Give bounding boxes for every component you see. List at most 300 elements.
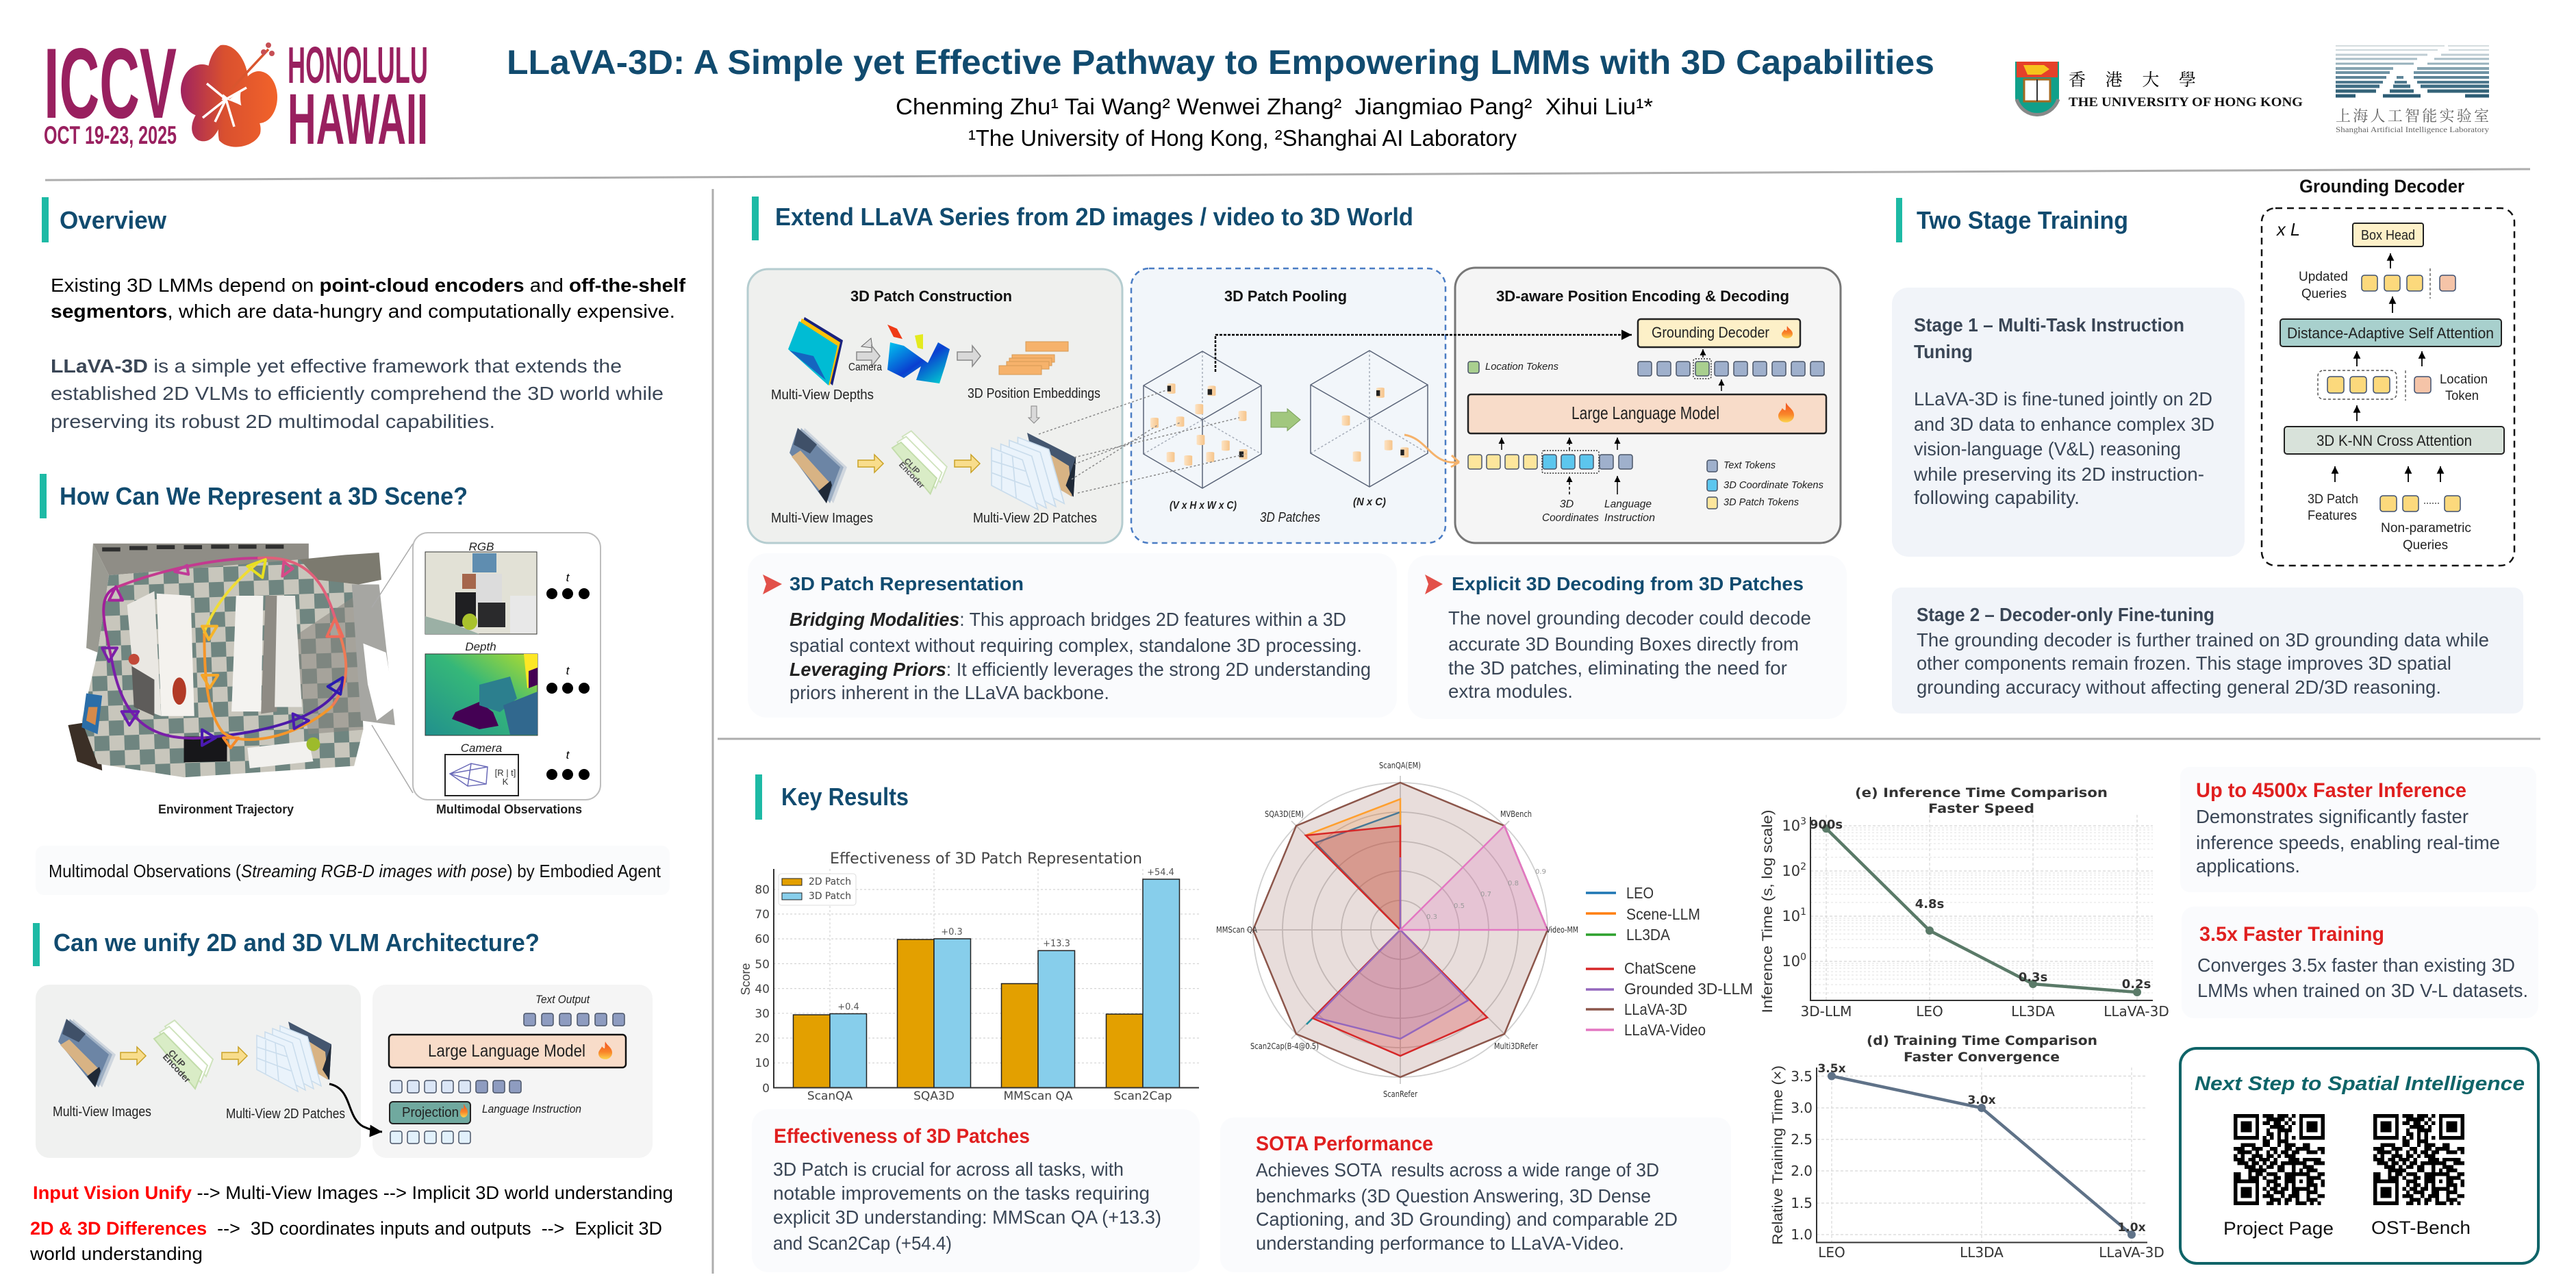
heading: How Can We Represent a 3D Scene? bbox=[60, 482, 468, 510]
y axis label: Relative Training Time (×) bbox=[1770, 1065, 1786, 1245]
value labels: 3.5x bbox=[1817, 1062, 1846, 1076]
logo: University of Hong Kong: THE UNIVERSITY OF HONG KONG bbox=[2069, 95, 2303, 110]
card: stage 1 bbox=[1892, 288, 2245, 557]
y tick labels bbox=[1791, 1068, 1813, 1243]
x tick labels bbox=[1801, 1003, 2169, 1020]
label: language instruction bbox=[1604, 498, 1655, 524]
label: 3D patch features: 3D Patch bbox=[2308, 492, 2358, 507]
card: effectiveness of 3D patches: explicit 3D understanding: MMScan QA (+13.3) bbox=[773, 1207, 1161, 1228]
camera pose box: [R | t] bbox=[495, 768, 516, 778]
multi-view 2D patches bbox=[257, 1022, 331, 1091]
body text: segmentors , which are data-hungry and computationally expensive. bbox=[51, 301, 675, 322]
label: location token: Location bbox=[2440, 372, 2488, 387]
y tick labels: 0 bbox=[762, 1082, 770, 1096]
body text: established 2D VLMs to efficiently comprehend the 3D world while bbox=[51, 383, 664, 404]
CLIP encoder cards: CLIP bbox=[902, 456, 922, 476]
conference logo: ICCV Honolulu Hawaii: HAWAII bbox=[288, 79, 428, 160]
y tick labels: 2 bbox=[1800, 861, 1806, 872]
axes bbox=[1810, 817, 2153, 1000]
value labels: 0.3s bbox=[2019, 970, 2047, 985]
Grounding Decoder box: Grounding Decoder bbox=[1652, 324, 1769, 341]
box head: Box Head bbox=[2361, 228, 2415, 243]
y axis label: Inference Time (s, log scale) bbox=[1760, 809, 1776, 1013]
CLIP encoder cards: Encoder bbox=[161, 1052, 192, 1085]
legend: 2D Patch bbox=[809, 876, 851, 887]
axis labels: ScanRefer bbox=[1383, 1089, 1417, 1099]
card text: Bridging Modalities: This approach bridges 2D features within a 3D bbox=[790, 609, 1346, 630]
axis labels: ScanQA(EM) bbox=[1379, 761, 1421, 770]
legend: ChatScene bbox=[1624, 959, 1696, 977]
card: effectiveness of 3D patches: notable improvements on the tasks requiring bbox=[773, 1183, 1150, 1204]
series: Grounded 3D-LLM bbox=[1315, 857, 1468, 1039]
card: faster inference: applications. bbox=[2196, 855, 2300, 876]
x tick labels: LLaVA-3D bbox=[2104, 1003, 2169, 1020]
conference logo: ICCV Honolulu Hawaii: OCT 19-23, 2025 bbox=[44, 121, 177, 149]
x tick labels: SQA3D bbox=[913, 1089, 955, 1103]
value labels bbox=[837, 868, 1174, 1012]
CLIP encoder cards bbox=[892, 431, 947, 494]
section: Overview bbox=[42, 197, 686, 432]
label: non-parametric queries: Non-parametric bbox=[2381, 521, 2471, 535]
logo: Shanghai AI Laboratory: 上海人工智能实验室 bbox=[2336, 105, 2489, 126]
card: stage 1: following capability. bbox=[1914, 487, 2080, 508]
card: stage 1: while preserving its 2D instruction- bbox=[1913, 464, 2204, 485]
legend: token types bbox=[1707, 459, 1823, 509]
radial tick labels: 0.7 bbox=[1480, 891, 1491, 898]
caption box: Multimodal Observations (Streaming RGB-D images with pose) by Embodied Agent bbox=[49, 861, 661, 881]
accent bar bbox=[755, 774, 762, 820]
QR code: OST-Bench bbox=[2373, 1116, 2464, 1203]
section: Can we unify 2D and 3D VLM Architecture bbox=[29, 923, 673, 1264]
section: Key Results bbox=[739, 761, 2538, 1272]
label: location token bbox=[2440, 372, 2488, 403]
value labels: +13.3 bbox=[1043, 939, 1070, 949]
legend: Grounded 3D-LLM bbox=[1624, 980, 1753, 998]
label: Camera: Camera bbox=[461, 742, 502, 755]
y tick labels: 3.0 bbox=[1791, 1100, 1813, 1116]
card: faster training: Converges 3.5x faster than existing 3D bbox=[2197, 955, 2515, 976]
label: 3D patch features bbox=[2308, 492, 2358, 523]
bars: 3D patch bbox=[830, 879, 1179, 1087]
distance-adaptive self attention: Distance-Adaptive Self Attention bbox=[2287, 325, 2494, 342]
label: 3D Patches bbox=[1260, 510, 1320, 525]
x tick labels: Scan2Cap bbox=[1113, 1089, 1172, 1103]
pooled patches bbox=[1150, 383, 1409, 466]
panel title: 3D-aware Position Encoding & Decoding bbox=[1496, 288, 1789, 305]
card: stage 2: The grounding decoder is further trained on 3D grounding data while bbox=[1917, 629, 2489, 651]
label: 3D coordinates: 3D bbox=[1560, 498, 1574, 510]
line chart: inference time bbox=[1760, 785, 2169, 1020]
y axis label: Score bbox=[739, 963, 753, 996]
label: location token: Token bbox=[2445, 389, 2479, 403]
y tick labels: 40 bbox=[755, 983, 770, 996]
radial tick labels: 0.3 bbox=[1426, 913, 1437, 921]
logo: Shanghai AI Laboratory bbox=[2336, 46, 2489, 134]
legend: token types: 3D Coordinate Tokens bbox=[1723, 479, 1823, 491]
label: OST-Bench: OST-Bench bbox=[2371, 1217, 2471, 1238]
card: stage 2 bbox=[1892, 588, 2523, 714]
cube: N x C bbox=[1311, 351, 1428, 487]
card: explicit 3D decoding bbox=[1408, 555, 1847, 719]
y tick labels: 80 bbox=[755, 883, 770, 897]
LLM box bbox=[1468, 394, 1826, 433]
logo: University of Hong Kong: 香港大學 bbox=[2069, 66, 2196, 91]
card: SOTA performance: understanding performance to LLaVA-Video. bbox=[1256, 1233, 1624, 1254]
depth stack bbox=[788, 317, 843, 386]
icon: camera bbox=[861, 338, 872, 348]
conference logo: ICCV Honolulu Hawaii bbox=[44, 27, 428, 160]
text: HONOLULU bbox=[288, 36, 428, 94]
box head bbox=[2353, 223, 2423, 247]
panel: 3D patch construction bbox=[748, 269, 1122, 543]
CLIP encoder cards: Encoder bbox=[897, 460, 926, 490]
input token row bbox=[1468, 451, 1632, 473]
panel: vision pipeline bbox=[36, 985, 361, 1158]
arrow: dashed to grounding decoder bbox=[1215, 335, 1632, 372]
section: Two Stage Training bbox=[1892, 176, 2523, 714]
legend: location tokens: Location Tokens bbox=[1485, 361, 1558, 372]
arrows bbox=[2335, 466, 2440, 482]
label: Camera bbox=[848, 362, 882, 373]
projection box bbox=[390, 1102, 470, 1124]
y tick labels: 10 bbox=[755, 1057, 770, 1070]
arrow bbox=[957, 346, 981, 366]
caption: multimodal observations: Multimodal Observations bbox=[436, 803, 582, 816]
card: SOTA performance: SOTA Performance bbox=[1256, 1133, 1433, 1155]
card heading: 3D Patch Representation bbox=[790, 573, 1024, 594]
accent bar bbox=[752, 197, 759, 240]
card: effectiveness of 3D patches: and Scan2Cap (+54.4) bbox=[773, 1233, 952, 1254]
x tick labels: MMScan QA bbox=[1003, 1089, 1073, 1103]
legend bbox=[779, 874, 856, 905]
label: non-parametric queries: Queries bbox=[2403, 538, 2448, 553]
arrow: patches to tokens bbox=[329, 1084, 382, 1132]
y tick labels: 3.5 bbox=[1791, 1068, 1813, 1085]
panel title: 3D Patch Construction bbox=[850, 288, 1012, 305]
RGB image bbox=[425, 552, 537, 634]
axis labels: Scan2Cap(B-4@0.5) bbox=[1250, 1041, 1319, 1051]
card text bbox=[790, 609, 1371, 703]
label: language instruction: Instruction bbox=[1604, 512, 1655, 524]
card: stage 1: vision-language (V&L) reasoning bbox=[1914, 438, 2181, 459]
logo: Shanghai AI Laboratory: Shanghai Artificial Intelligence Laboratory bbox=[2336, 125, 2489, 134]
radial tick labels bbox=[1426, 868, 1546, 921]
label: 3D Position Embeddings bbox=[968, 386, 1100, 401]
y tick labels: 10 bbox=[1782, 908, 1800, 924]
section: How Can We Represent a 3D Scene bbox=[36, 474, 670, 895]
caption: environment trajectory: Environment Trajectory bbox=[158, 803, 294, 816]
chart title: Faster Convergence bbox=[1904, 1050, 2060, 1065]
3D K-NN cross attention bbox=[2284, 427, 2504, 454]
card: faster training: LMMs when trained on 3D V-L datasets. bbox=[2197, 980, 2528, 1001]
non-parametric query tokens bbox=[2380, 496, 2460, 512]
axis labels: MVBench bbox=[1500, 809, 1532, 819]
label: updated queries bbox=[2299, 270, 2348, 301]
label: language instruction: Language bbox=[1604, 498, 1652, 510]
legend: LL3DA bbox=[1626, 926, 1671, 944]
card: faster inference: Up to 4500x Faster Inference bbox=[2196, 779, 2466, 802]
series: LEO scan2cap bbox=[1306, 930, 1400, 1024]
card text bbox=[1448, 607, 1811, 702]
body text: preserving its robust 2D multimodal capabilities. bbox=[51, 411, 495, 432]
card: 3D patch representation bbox=[748, 553, 1397, 718]
panel: next step to spatial intelligence bbox=[2180, 1048, 2538, 1263]
series: ChatScene bbox=[1306, 826, 1487, 1056]
y tick labels: 20 bbox=[755, 1032, 770, 1046]
x tick labels: LEO bbox=[1916, 1003, 1943, 1020]
diagram title: Grounding Decoder bbox=[2299, 176, 2464, 197]
label: Multi-View 2D Patches bbox=[973, 511, 1097, 526]
arrow: green bbox=[1271, 409, 1300, 431]
card text: accurate 3D Bounding Boxes directly from bbox=[1448, 633, 1799, 655]
chevron bbox=[763, 574, 782, 594]
camera pose box bbox=[445, 755, 518, 796]
projection box: Projection bbox=[402, 1105, 459, 1120]
legend bbox=[1586, 884, 1753, 1039]
y tick labels bbox=[1782, 816, 1806, 970]
y tick labels: 1.5 bbox=[1791, 1195, 1813, 1211]
chart title: Faster Speed bbox=[1928, 801, 2034, 816]
label: 3D coordinates bbox=[1542, 498, 1599, 524]
axes bbox=[774, 869, 1199, 1087]
time dots: t bbox=[566, 571, 570, 584]
arrows into LLM bbox=[1502, 438, 1617, 450]
card: stage 2: grounding accuracy without affecting general 2D/3D reasoning. bbox=[1917, 677, 2441, 698]
y tick labels: 1.0 bbox=[1791, 1226, 1813, 1243]
logo: University of Hong Kong bbox=[2015, 62, 2303, 116]
chart title: (e) Inference Time Comparison bbox=[1855, 785, 2108, 800]
LLM box: Large Language Model bbox=[428, 1041, 585, 1061]
distance-adaptive self attention bbox=[2280, 319, 2501, 346]
label: 3D patch features: Features bbox=[2308, 509, 2357, 523]
label: RGB: RGB bbox=[469, 540, 494, 553]
radial tick labels: 0.8 bbox=[1508, 880, 1519, 887]
series: LEO bbox=[1315, 812, 1400, 930]
heading: Extend LLaVA Series from 2D images / video to 3D World bbox=[775, 203, 1413, 231]
arrows bbox=[1702, 349, 1704, 357]
card: SOTA performance: benchmarks (3D Question Answering, 3D Dense bbox=[1256, 1185, 1651, 1207]
accent bar bbox=[33, 923, 40, 966]
axis labels: Multi3DRefer bbox=[1494, 1041, 1538, 1051]
panel: 3D patch pooling bbox=[1131, 268, 1445, 543]
camera pose box: K bbox=[503, 776, 509, 787]
arrow bbox=[2356, 405, 2358, 421]
y tick labels: 50 bbox=[755, 958, 770, 972]
label: project page: Project Page bbox=[2223, 1218, 2334, 1239]
legend: LLaVA-3D bbox=[1624, 1000, 1687, 1018]
card: SOTA performance: Achieves SOTA results across a wide range of 3D bbox=[1256, 1159, 1659, 1180]
card heading: Explicit 3D Decoding from 3D Patches bbox=[1452, 573, 1804, 594]
axis labels: SQA3D(EM) bbox=[1265, 809, 1304, 819]
card: faster training bbox=[2182, 907, 2538, 1018]
y tick labels: 10 bbox=[1782, 863, 1800, 879]
arrow bbox=[1721, 379, 1722, 391]
x tick labels bbox=[1818, 1244, 2164, 1261]
label: Multi-View 2D Patches bbox=[226, 1107, 345, 1122]
y tick labels: 10 bbox=[1782, 953, 1800, 970]
QR code: project page bbox=[2234, 1116, 2325, 1203]
label: updated queries: Updated bbox=[2299, 270, 2348, 284]
heading: Overview bbox=[60, 206, 167, 234]
time dots: t bbox=[566, 748, 570, 761]
3D position embeddings bbox=[999, 342, 1068, 375]
legend: token types: 3D Patch Tokens bbox=[1723, 496, 1799, 508]
panel: language model bbox=[372, 985, 653, 1158]
dashed frame bbox=[2262, 208, 2514, 566]
label: non-parametric queries bbox=[2381, 521, 2471, 553]
chart title: (d) Training Time Comparison bbox=[1867, 1033, 2097, 1048]
accent bar bbox=[1896, 198, 1902, 242]
label: language instruction: Language Instruction bbox=[482, 1102, 581, 1115]
statement: differences bbox=[29, 1218, 662, 1264]
chart title bbox=[1867, 1033, 2097, 1065]
axis labels: Video-MM bbox=[1546, 925, 1578, 935]
x tick labels: LL3DA bbox=[1960, 1244, 2004, 1261]
body text: LLaVA-3D is a simple yet effective framework that extends the bbox=[51, 355, 622, 377]
arrow bbox=[955, 455, 980, 472]
label: Depth: Depth bbox=[465, 640, 496, 653]
card: faster training: 3.5x Faster Training bbox=[2199, 923, 2384, 946]
depth image bbox=[425, 654, 538, 735]
card: faster inference bbox=[2180, 767, 2536, 892]
data line bbox=[1822, 824, 2141, 996]
value labels: +0.4 bbox=[837, 1002, 859, 1012]
x tick labels bbox=[807, 1089, 1172, 1103]
3D K-NN cross attention: 3D K-NN Cross Attention bbox=[2316, 432, 2472, 449]
CLIP encoder cards: CLIP bbox=[166, 1048, 188, 1070]
y tick labels: 1 bbox=[1800, 907, 1806, 918]
card: stage 2: other components remain frozen. This stage improves 3D spatial bbox=[1917, 653, 2451, 674]
value labels: 3.0x bbox=[1967, 1094, 1996, 1107]
statement: differences: 2D & 3D Differences --> 3D coordinates inputs and outputs --> Explicit 3D bbox=[30, 1218, 662, 1239]
panel title: 3D Patch Pooling bbox=[1224, 288, 1347, 305]
panel: multimodal observations bbox=[413, 533, 601, 800]
value labels: +0.3 bbox=[941, 927, 963, 937]
arrow bbox=[2390, 253, 2391, 268]
value labels bbox=[1817, 1062, 2146, 1235]
x tick labels: LLaVA-3D bbox=[2099, 1244, 2164, 1261]
value labels: +54.4 bbox=[1147, 868, 1174, 878]
chevron bbox=[1425, 574, 1443, 594]
legend: LLaVA-Video bbox=[1624, 1021, 1706, 1039]
arrow bbox=[2392, 296, 2393, 313]
heading: Can we unify 2D and 3D VLM Architecture? bbox=[53, 929, 540, 957]
caption box bbox=[36, 846, 670, 895]
card: stage 1: and 3D data to enhance complex 3D bbox=[1914, 414, 2214, 435]
icon: multi-view images bbox=[58, 1019, 116, 1087]
conference logo: ICCV Honolulu Hawaii: ICCV bbox=[44, 27, 177, 139]
card: SOTA performance: Captioning, and 3D Grounding) and comparable 2D bbox=[1256, 1209, 1678, 1230]
diagram: grounding decoder bbox=[2262, 176, 2514, 566]
x tick labels: LEO bbox=[1818, 1244, 1845, 1261]
arrow bbox=[121, 1047, 146, 1065]
body text: Existing 3D LMMs depend on point-cloud encoders and off-the-shelf bbox=[51, 275, 686, 296]
axes bbox=[1817, 1068, 2147, 1242]
legend: 3D Patch bbox=[809, 891, 851, 902]
body text bbox=[51, 275, 686, 432]
time dots bbox=[546, 748, 590, 780]
card: stage 1: Tuning bbox=[1914, 341, 1973, 362]
label: 3D coordinates: Coordinates bbox=[1542, 512, 1599, 524]
card: stage 2: Stage 2 – Decoder-only Fine-tuning bbox=[1917, 604, 2214, 625]
arrow bbox=[222, 1047, 247, 1065]
y tick labels: 30 bbox=[755, 1007, 770, 1021]
x tick labels: 3D-LLM bbox=[1801, 1003, 1852, 1020]
bars: 2D patch bbox=[793, 939, 1143, 1087]
arrows from inputs bbox=[1569, 476, 1617, 494]
statement: differences: world understanding bbox=[29, 1243, 203, 1264]
accent bar bbox=[42, 197, 49, 242]
value labels: 1.0x bbox=[2117, 1221, 2146, 1235]
value labels bbox=[1810, 818, 2151, 992]
accent bar bbox=[40, 474, 47, 518]
arrow: down bbox=[1028, 406, 1039, 423]
query tokens with dashed group bbox=[2318, 370, 2431, 401]
label: updated queries: Queries bbox=[2301, 287, 2347, 301]
value labels: 4.8s bbox=[1915, 897, 1944, 911]
patch tokens bbox=[390, 1131, 470, 1144]
patch projection lines bbox=[1039, 390, 1246, 493]
card text: Leveraging Priors: It efficiently leverages the strong 2D understanding bbox=[790, 659, 1371, 680]
time dots: t bbox=[566, 664, 570, 677]
output tokens bbox=[524, 1013, 624, 1026]
orange arrow: patches to tokens bbox=[1404, 435, 1459, 467]
value labels: 0.2s bbox=[2122, 977, 2151, 992]
card: faster inference: Demonstrates significantly faster bbox=[2196, 806, 2468, 827]
multi-view images stack bbox=[790, 428, 847, 503]
time dots bbox=[546, 571, 590, 599]
legend: Scene-LLM bbox=[1626, 905, 1700, 923]
time dots bbox=[546, 664, 590, 694]
card: faster inference: inference speeds, enabling real-time bbox=[2196, 832, 2500, 853]
authors: Chenming Zhu¹ Tai Wang² Wenwei Zhang² Jiangmiao Pang² Xihui Liu¹* bbox=[896, 94, 1653, 119]
label: (N x C) bbox=[1353, 496, 1386, 508]
card: SOTA performance bbox=[1220, 1117, 1731, 1272]
card text: the 3D patches, eliminating the need for bbox=[1448, 657, 1787, 679]
LLM box bbox=[389, 1035, 626, 1068]
line chart: training time bbox=[1770, 1033, 2164, 1261]
legend: LEO bbox=[1626, 884, 1654, 902]
Grounding Decoder box bbox=[1638, 319, 1800, 347]
y tick labels: 2.5 bbox=[1791, 1131, 1813, 1148]
arrow bbox=[857, 346, 880, 366]
card text: spatial context without requiring complex, standalone 3D processing. bbox=[790, 635, 1362, 656]
label: text output: Text Output bbox=[535, 993, 590, 1006]
card: effectiveness of 3D patches bbox=[752, 1109, 1200, 1272]
chart title: Effectiveness of 3D Patch Representation bbox=[830, 850, 1142, 868]
card text: extra modules. bbox=[1448, 681, 1573, 702]
y tick labels bbox=[755, 883, 770, 1096]
legend: token types: Text Tokens bbox=[1723, 459, 1776, 471]
y tick labels: 3 bbox=[1800, 816, 1806, 827]
panel: 3D-aware position encoding and decoding bbox=[1455, 268, 1841, 543]
arrows bbox=[2357, 351, 2422, 366]
heading: Key Results bbox=[781, 783, 909, 811]
x tick labels: LL3DA bbox=[2011, 1003, 2055, 1020]
card text: priors inherent in the LLaVA backbone. bbox=[790, 682, 1109, 703]
x tick labels: ScanQA bbox=[807, 1089, 853, 1103]
y tick labels: 70 bbox=[755, 908, 770, 922]
LLM box: Large Language Model bbox=[1571, 403, 1719, 423]
series: LLaVA-Video bbox=[1400, 826, 1548, 930]
bar chart: effectiveness of 3D patch representation bbox=[739, 850, 1199, 1103]
axis labels: MMScan QA bbox=[1216, 925, 1258, 935]
y tick labels: 2.0 bbox=[1791, 1163, 1813, 1179]
repeat label: x L bbox=[2275, 219, 2300, 240]
poster title: LLaVA-3D: A Simple yet Effective Pathway to Empowering LMMs with 3D Capabilities bbox=[507, 43, 1934, 81]
section: Extend LLaVA Series bbox=[748, 197, 1847, 719]
label: Multi-View Images bbox=[771, 511, 873, 526]
